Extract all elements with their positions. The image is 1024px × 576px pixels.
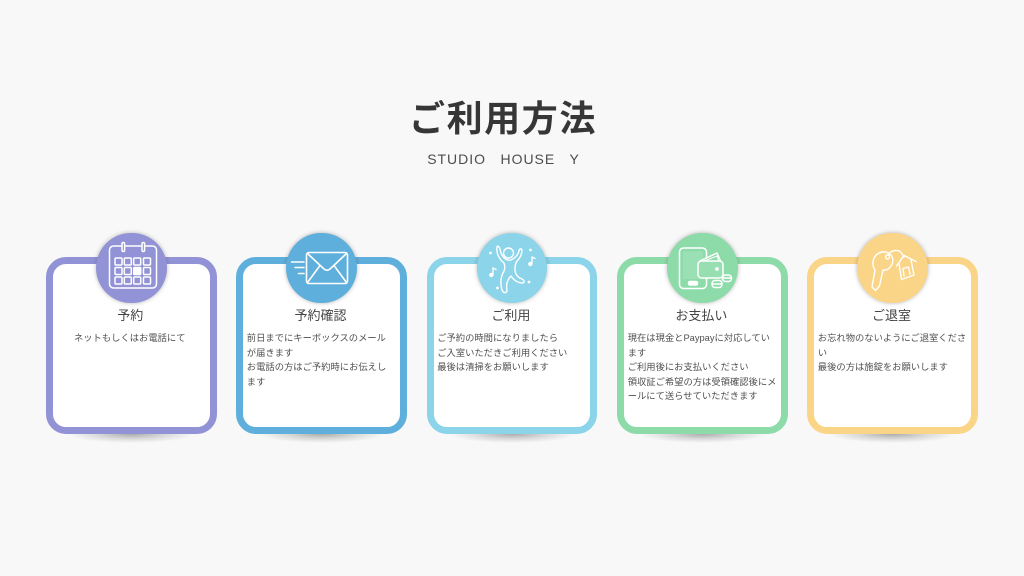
icon disc <box>286 232 357 303</box>
heading: ご利用 <box>491 308 530 323</box>
body text: ご入室いただきご利用ください <box>437 348 567 358</box>
card shadow <box>449 434 576 443</box>
panel: step 5 checkout <box>807 230 978 442</box>
heading: 予約確認 <box>295 308 347 323</box>
card shadow <box>829 434 956 443</box>
card frame <box>617 257 788 434</box>
body text: お忘れ物のないようにご退室くださ <box>818 333 966 343</box>
icon: phone, wallet and coins <box>678 247 732 290</box>
heading: 予約 <box>117 308 143 323</box>
panel: step 1 reservation <box>46 230 217 442</box>
subtitle: STUDIO HOUSE Y <box>427 150 580 166</box>
body text <box>437 333 567 372</box>
icon: key and house tag <box>871 250 917 292</box>
body text: ご利用後にお支払いください <box>628 362 749 372</box>
card frame <box>236 257 407 434</box>
body text: ご予約の時間になりましたら <box>437 333 558 343</box>
card frame <box>807 257 978 434</box>
body text: 前日までにキーボックスのメール <box>247 333 386 343</box>
body text: 領収証ご希望の方は受領確認後にメ <box>628 377 776 387</box>
heading: ご退室 <box>872 308 911 323</box>
body text: 現在は現金とPaypayに対応してい <box>628 333 770 343</box>
icon disc <box>667 232 738 303</box>
card shadow <box>639 434 766 443</box>
title: ご利用方法 <box>409 98 597 139</box>
heading: お支払い <box>675 308 727 323</box>
body text: い <box>818 348 827 358</box>
body text: ます <box>628 348 646 358</box>
body text: 最後の方は施錠をお願いします <box>818 362 948 372</box>
body text: ールにて送らせていただきます <box>628 391 758 401</box>
icon: envelope <box>290 252 348 284</box>
card frame <box>46 257 216 434</box>
card shadow <box>258 434 385 443</box>
icon: dancing person <box>489 246 536 294</box>
body text: が届きます <box>247 348 293 358</box>
body text: ネットもしくはお電話にて <box>74 333 186 343</box>
icon disc <box>857 232 928 303</box>
card frame <box>427 257 597 434</box>
panel: step 4 payment <box>617 230 788 442</box>
icon: calendar <box>108 242 158 289</box>
body text: ます <box>247 377 265 387</box>
card shadow <box>68 434 195 443</box>
panel: step 2 confirmation <box>236 230 407 442</box>
panel: step 3 use <box>427 230 597 442</box>
body text: 最後は清掃をお願いします <box>437 362 549 372</box>
body text <box>818 333 966 372</box>
body text <box>628 333 776 401</box>
icon disc <box>96 232 166 303</box>
body text: お電話の方はご予約時にお伝えし <box>247 362 386 372</box>
icon disc <box>477 232 547 303</box>
body text <box>247 333 386 387</box>
